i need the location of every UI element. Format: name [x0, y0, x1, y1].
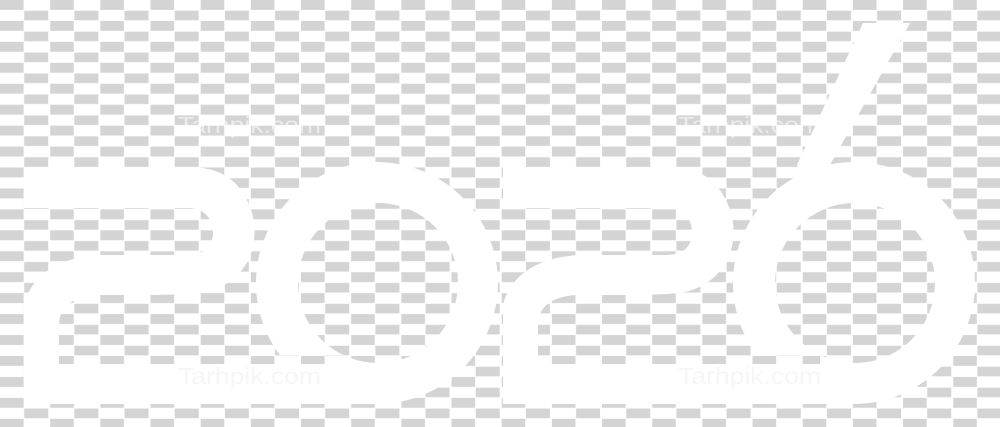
digit 6: ring and diagonal stem — [733, 23, 975, 404]
watermark: top left: Tarhpik.com — [178, 112, 321, 138]
watermark: bottom right: Tarhpik.com — [678, 363, 821, 389]
digit 2 (second) — [503, 168, 856, 404]
watermark: top right: Tarhpik.com — [678, 112, 821, 138]
digit 0 — [256, 162, 498, 404]
watermark: bottom left: Tarhpik.com — [178, 363, 321, 389]
digit 2 (first) — [24, 168, 377, 404]
